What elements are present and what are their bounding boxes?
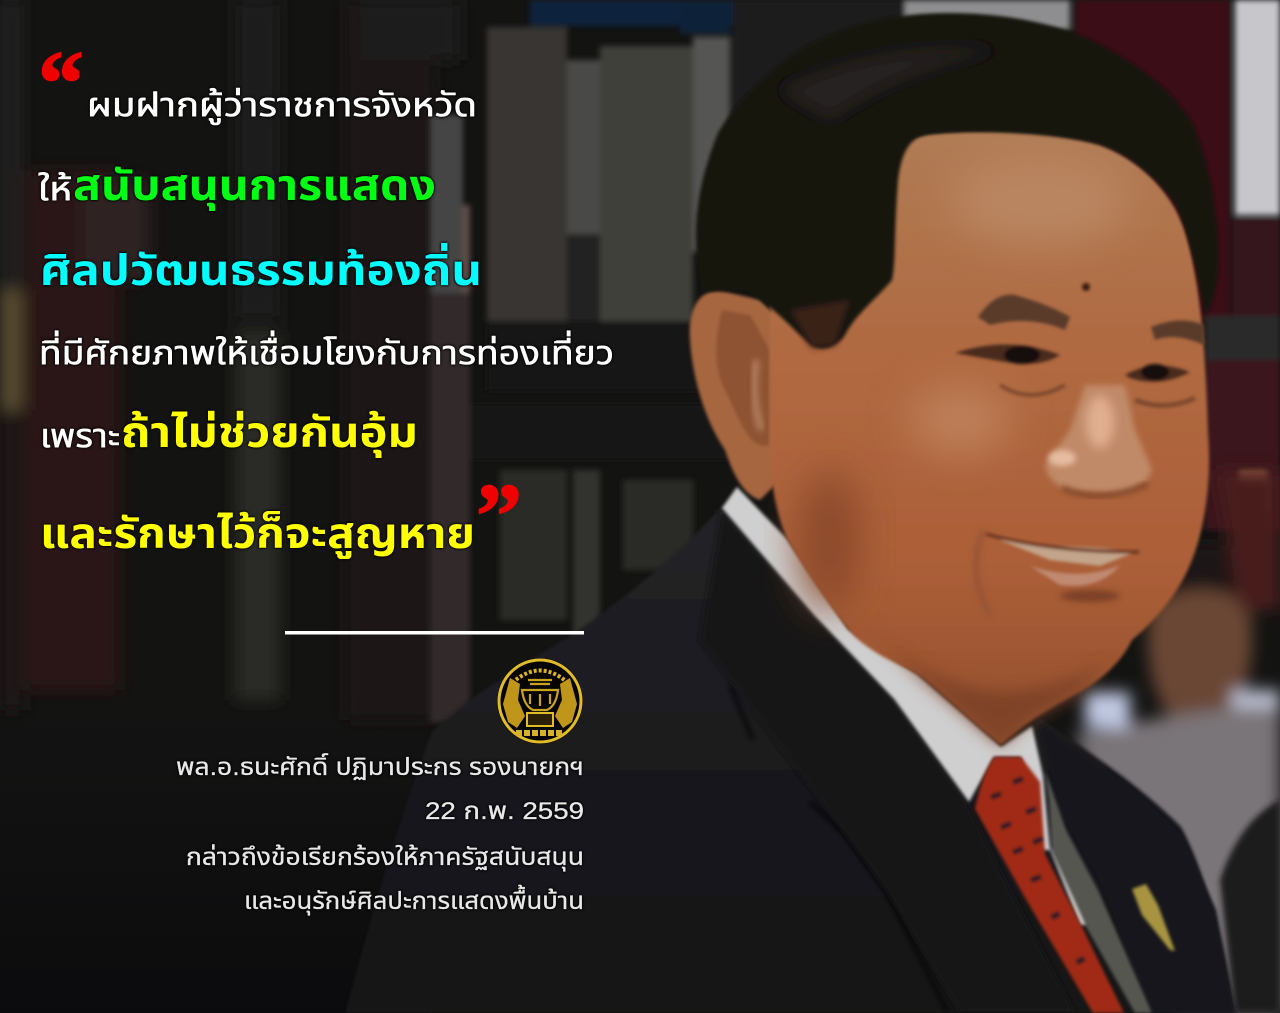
seal: top arc of ornament [512, 670, 568, 683]
seal: pedestal [527, 713, 553, 726]
icon: lapel pin [1132, 884, 1175, 951]
seal: bottom band [516, 730, 564, 736]
icon: government seal [497, 658, 583, 744]
portrait: suit jacket [345, 505, 1235, 1013]
attribution block [176, 752, 584, 916]
quote line 2: ให้ [38, 170, 72, 207]
portrait: face [770, 131, 1209, 745]
portrait: red tie [975, 757, 1124, 1013]
quote line 5: เพราะ [40, 417, 120, 454]
seal: guardian lions [503, 678, 577, 728]
quote line 3: ศิลปวัฒนธรรมท้องถิ่น [40, 243, 482, 295]
seal: bowl emblem [522, 680, 558, 710]
divider line [285, 631, 584, 634]
closing quote mark: ” [476, 465, 522, 567]
portrait: facial features [955, 283, 1204, 406]
fade at bottom of the background [0, 700, 430, 1013]
portrait: shirt [722, 487, 1152, 1013]
opening quote mark: “ [38, 32, 84, 134]
context line 2: และอนุรักษ์ศิลปะการแสดงพื้นบ้าน [244, 884, 584, 916]
portrait: nose [1045, 385, 1152, 496]
portrait: ear [690, 290, 800, 500]
quote text [38, 86, 614, 559]
quote line 1: ผมฝากผู้ว่าราชการจังหวัด [87, 86, 477, 125]
quote line 6: และรักษาไว้ก็จะสูญหาย [40, 510, 475, 559]
quote line 4: ที่มีศักยภาพให้เชื่อมโยงกับการท่องเที่ยว [39, 330, 614, 371]
context line 1: กล่าวถึงข้อเรียกร้องให้ภาครัฐสนับสนุน [186, 843, 584, 872]
portrait: hair [696, 13, 1218, 349]
background figure [1075, 470, 1280, 1013]
background figure dark suit [1220, 800, 1280, 1013]
portrait: smile [976, 530, 1139, 615]
quote line 5: ถ้าไม่ช่วยกันอุ้ม [121, 409, 418, 458]
date: 22 ก.พ. 2559 [425, 798, 584, 825]
quote line 2: สนับสนุนการแสดง [73, 162, 436, 211]
speaker name: พล.อ.ธนะศักดิ์ ปฏิมาประกร รองนายกฯ [176, 752, 584, 781]
